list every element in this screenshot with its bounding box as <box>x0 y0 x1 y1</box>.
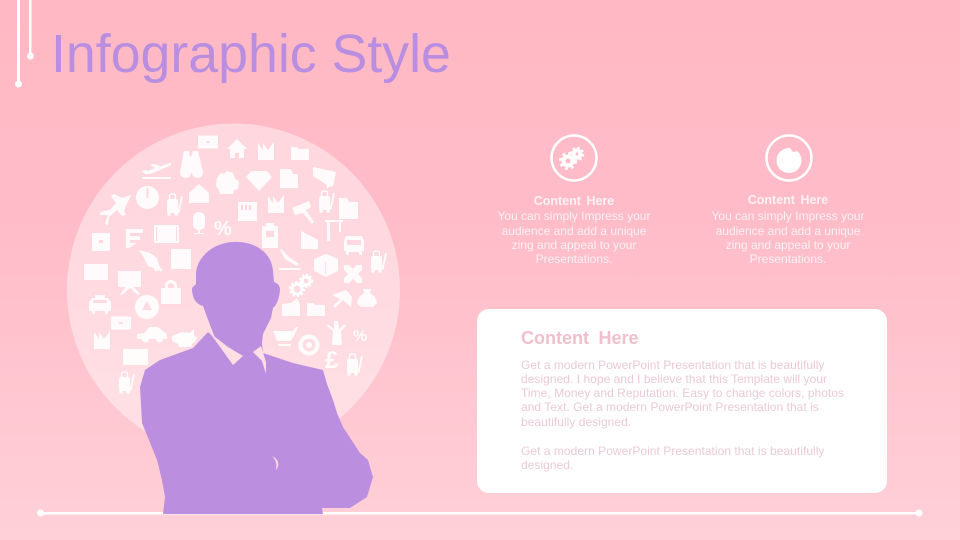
text block: column two: zing and appeal to your <box>726 238 850 252</box>
icon: umbrella <box>332 290 352 308</box>
icon: briefcase <box>84 264 108 280</box>
text block: card body: Get a modern PowerPoint Presentation that is beautifully <box>521 444 824 458</box>
icon: bag <box>262 223 278 248</box>
icon: factory <box>94 331 110 349</box>
text block: card body: beautifully designed. <box>521 415 631 429</box>
text block: column one: Content Here <box>534 194 614 208</box>
icon: envelope <box>198 136 218 148</box>
icon: cctv <box>292 201 314 224</box>
icon badge: pie chart <box>765 134 813 182</box>
icon: plane landing <box>142 163 171 179</box>
icon: square <box>171 249 191 269</box>
icon: luggage <box>319 191 335 213</box>
icon: pound: £ <box>325 347 339 374</box>
icon: box <box>314 254 338 277</box>
text block: column one: Presentations. <box>536 252 612 266</box>
text block: column two: Content Here <box>748 193 828 207</box>
icon: folder <box>291 147 309 160</box>
icon: envelope <box>111 316 131 330</box>
icon: folder <box>339 198 358 219</box>
text block: column one: You can simply Impress your <box>498 209 650 223</box>
icon: percent: % <box>353 328 367 345</box>
icon: binoculars <box>180 151 203 178</box>
icon: plane <box>100 194 131 225</box>
icon: money bag <box>357 289 377 307</box>
icon: luggage <box>347 354 363 376</box>
text block: column one: zing and appeal to your <box>512 238 636 252</box>
panel: content card <box>477 309 887 493</box>
icon: megaphone <box>313 167 336 189</box>
icon: clock <box>136 186 159 209</box>
heading: card title: Content Here <box>521 328 639 348</box>
icon badge: gears <box>550 134 598 182</box>
icon: lock <box>161 280 181 304</box>
text block: column two: audience and add a unique <box>716 224 860 238</box>
icon: microphone <box>193 212 205 234</box>
title: Infographic Style <box>51 24 451 84</box>
icon: bus <box>344 236 364 255</box>
icon: wallet <box>282 298 300 316</box>
icon: factory <box>258 142 274 160</box>
icon: book <box>238 202 257 221</box>
shirt collar <box>210 333 266 374</box>
text block: card body: designed. <box>521 458 573 472</box>
icon: camera square <box>92 233 110 251</box>
businessman silhouette <box>140 242 373 514</box>
sleeve highlight <box>272 456 278 470</box>
icon: gears <box>290 275 312 296</box>
icon: printer <box>280 169 298 188</box>
icon: crane <box>325 220 343 241</box>
icon: school <box>189 184 209 203</box>
text block: column two: Presentations. <box>750 252 826 266</box>
icon: presentation board <box>118 271 141 295</box>
icon: puzzle <box>344 265 362 283</box>
icon: factory <box>268 195 284 213</box>
icon: piggy bank <box>172 329 197 347</box>
icon: folder <box>307 303 325 316</box>
icon cloud <box>84 136 387 394</box>
icon: briefcase <box>123 349 148 365</box>
icon: windmill <box>327 321 346 345</box>
icon: diamond <box>246 171 272 191</box>
icon: luggage <box>371 251 387 273</box>
text block: card body: Get a modern PowerPoint Presentation that is beautifully <box>521 358 824 372</box>
icon: compass <box>298 334 319 355</box>
icon: rocket <box>139 250 163 272</box>
text block: column one <box>498 194 650 266</box>
text block: card body: and Text. Get a modern PowerPoint Presentation that is <box>521 400 819 414</box>
icon: house <box>227 139 247 158</box>
icon: film panel <box>154 225 179 243</box>
text block: card body: Time, Money and Reputation. Easy to change colors, photos <box>521 386 844 400</box>
icon: taxi <box>89 295 111 314</box>
icon: shopping cart <box>273 327 298 346</box>
icon: luggage <box>167 194 183 216</box>
icon circle backdrop <box>67 124 400 456</box>
text block: column two: You can simply Impress your <box>712 209 864 223</box>
icon: clapper <box>301 231 318 249</box>
text block: card body: designed. I hope and I believe that this Template will your <box>521 372 827 386</box>
icon: recycle <box>135 295 159 319</box>
icon: car <box>137 327 167 342</box>
text block: column one: audience and add a unique <box>502 224 646 238</box>
icon: percent: % <box>214 218 232 240</box>
icon: plane landing <box>279 249 301 270</box>
icon: letter F <box>126 229 143 248</box>
icon: luggage <box>119 372 135 394</box>
text block: column two <box>712 193 864 266</box>
icon: camera <box>216 171 239 194</box>
